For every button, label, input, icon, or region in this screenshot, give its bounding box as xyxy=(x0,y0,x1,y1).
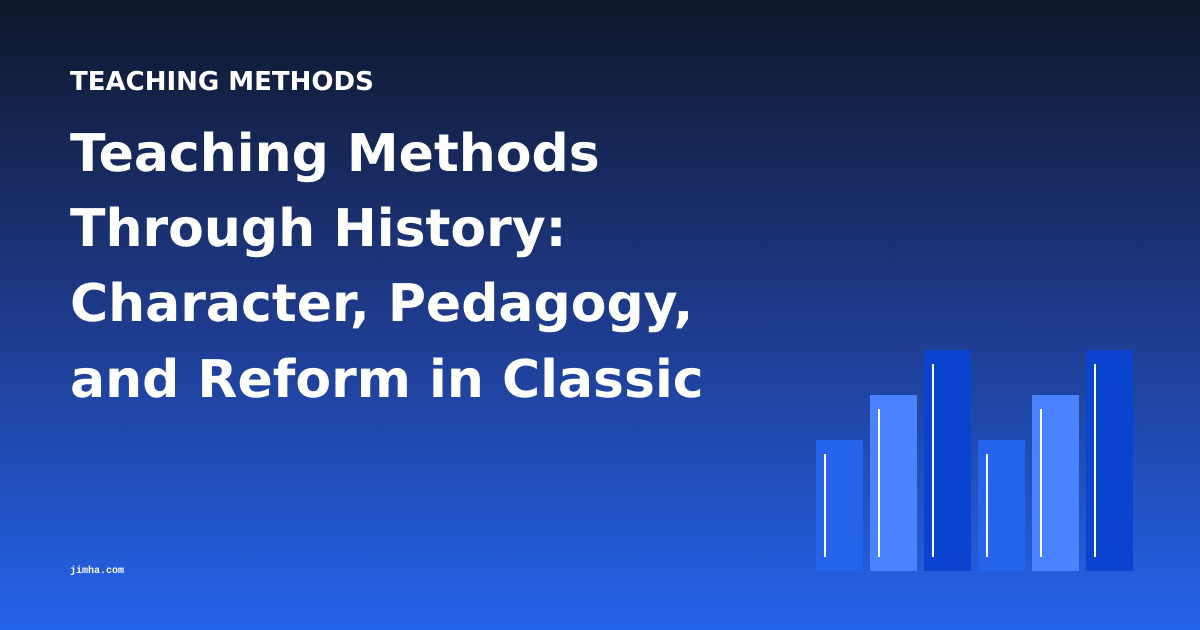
bar 2 xyxy=(870,395,917,571)
title xyxy=(70,124,704,410)
bar 6 xyxy=(1086,350,1133,571)
bar 5 xyxy=(1032,395,1079,571)
bar 3 xyxy=(924,350,971,571)
eyebrow heading: TEACHING METHODS xyxy=(70,67,374,97)
title: Character, Pedagogy, xyxy=(70,274,693,334)
bar 4 xyxy=(978,440,1025,571)
site domain: jimha.com xyxy=(70,566,124,577)
title: and Reform in Classic xyxy=(70,350,704,410)
bar 1 xyxy=(816,440,863,571)
title: Teaching Methods xyxy=(70,124,600,184)
title: Through History: xyxy=(70,199,566,259)
